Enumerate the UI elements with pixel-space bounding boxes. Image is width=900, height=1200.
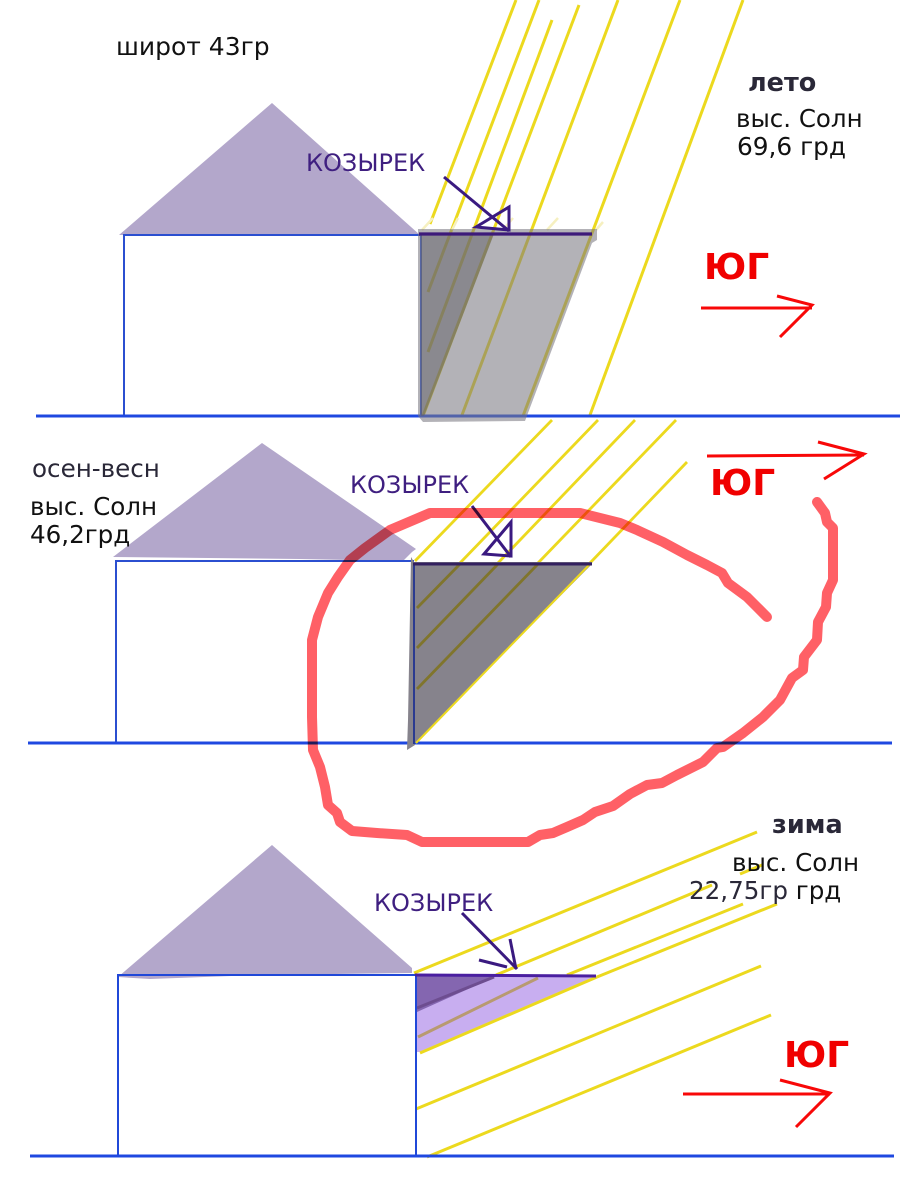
arrow: south winter xyxy=(683,1080,830,1127)
house roof: winter xyxy=(118,845,412,979)
arrow: south autumn xyxy=(707,442,864,479)
canopy: autumn xyxy=(413,562,592,566)
pale ray ticks above canopy: summer xyxy=(422,218,603,230)
text: autumn sun height: выс. Солн xyxy=(30,492,157,521)
heading: summer: лето xyxy=(748,68,816,98)
label: south summer: ЮГ xyxy=(704,247,769,288)
heading: winter: зима xyxy=(772,810,843,840)
arrow: canopy summer xyxy=(444,177,509,231)
label: south winter: ЮГ xyxy=(784,1035,849,1076)
heading: autumn: осен-весн xyxy=(32,454,160,483)
arrow: canopy autumn xyxy=(472,506,511,557)
canopy shadow: winter xyxy=(417,976,497,1012)
sun rays: winter xyxy=(414,832,777,1157)
wall edge: autumn xyxy=(413,563,415,744)
house roof: autumn xyxy=(113,443,416,561)
ground: summer xyxy=(36,414,900,418)
text: autumn sun angle: 46,2грд xyxy=(30,520,130,549)
window post shadow: autumn xyxy=(407,557,415,750)
label: canopy winter: КОЗЫРЕК xyxy=(374,889,493,917)
text: winter sun height: выс. Солн xyxy=(732,848,859,877)
house wall: winter xyxy=(118,975,416,1156)
text: summer sun height: выс. Солн xyxy=(736,104,863,133)
canopy: summer xyxy=(419,232,592,236)
lower ray along shadow edge: winter xyxy=(420,977,597,1053)
house wall: summer xyxy=(124,235,421,416)
highlight: hand-drawn red circle xyxy=(312,502,833,842)
label: latitude: широт 43гр xyxy=(116,32,270,61)
label: canopy summer: КОЗЫРЕК xyxy=(306,149,425,177)
canopy shadow: summer xyxy=(421,234,494,416)
ground: autumn xyxy=(28,742,892,744)
ground: winter xyxy=(30,1154,894,1158)
panel: winter xyxy=(30,810,894,1157)
text: winter sun angle: 22,75гр грд xyxy=(689,876,841,905)
shadow rays: autumn xyxy=(417,564,538,689)
sun rays: autumn xyxy=(415,420,687,563)
arrow: south summer xyxy=(701,296,812,337)
shadow rays: winter xyxy=(417,977,538,1037)
house roof: summer xyxy=(119,103,420,235)
shadow zone: summer xyxy=(418,229,597,422)
text: summer sun angle: 69,6 грд xyxy=(737,132,846,161)
hypotenuse ray: autumn xyxy=(416,564,590,743)
shadow zone: autumn xyxy=(413,562,592,743)
label: canopy autumn: КОЗЫРЕК xyxy=(350,471,469,499)
panel: summer xyxy=(36,0,900,422)
sun rays: summer xyxy=(423,0,743,416)
shadow zone: winter xyxy=(417,976,596,1052)
arrow: canopy winter xyxy=(462,913,517,969)
label: south autumn: ЮГ xyxy=(710,463,775,504)
canopy: winter xyxy=(415,975,596,976)
panel: autumn and spring xyxy=(28,420,892,842)
house wall: autumn xyxy=(116,561,414,743)
